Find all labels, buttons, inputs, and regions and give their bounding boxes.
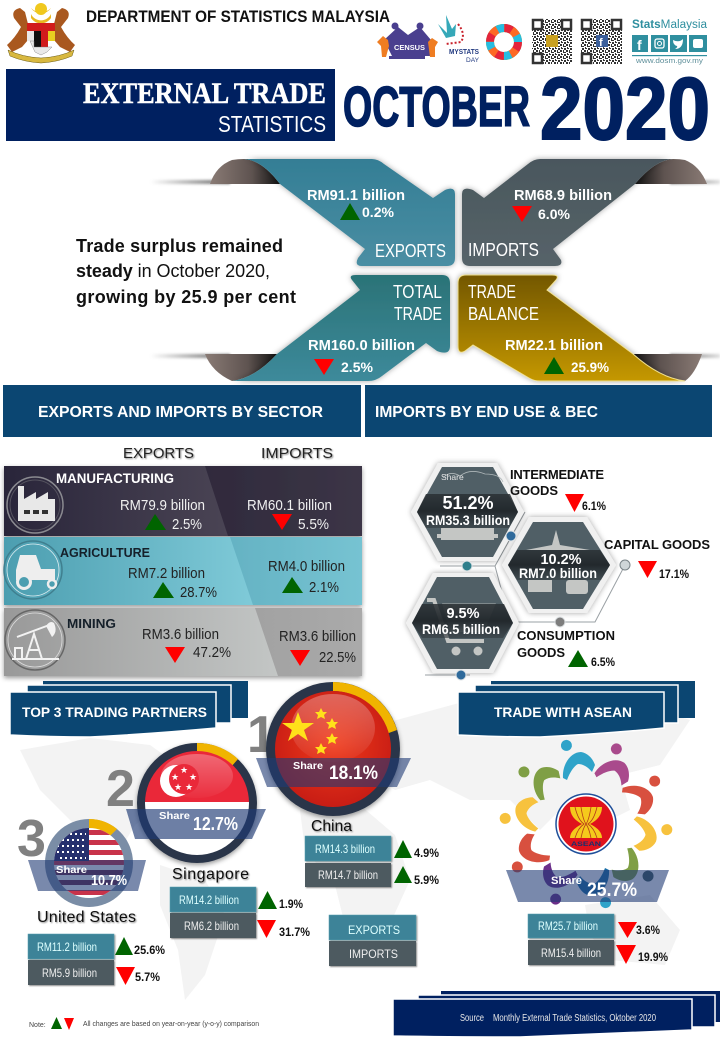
- ASEAN share and trade values: 19.9%: [638, 950, 668, 964]
- footnote: All changes are based on year-on-year (y-o-y) comparison: [83, 1019, 259, 1028]
- footnote: Note:: [29, 1022, 46, 1029]
- panel: agriculture: [4, 537, 362, 605]
- label: intermediate goods: GOODS: [510, 483, 558, 498]
- banner: top 3 trading partners: [10, 681, 248, 737]
- partner: China: RM14.3 billion: [315, 842, 375, 856]
- QR code: facebook: f: [599, 37, 603, 49]
- source banner: Source: [460, 1013, 484, 1024]
- panel: mining: RM3.6 billion: [142, 626, 219, 643]
- arrow: trade balance: RM22.1 billion: [505, 337, 603, 354]
- label: intermediate goods: [510, 467, 606, 513]
- headline message: growing by 25.9 per cent: [76, 287, 296, 307]
- partner: United States: RM5.9 billion: [42, 966, 97, 980]
- partner: Singapore: RM6.2 billion: [184, 919, 239, 933]
- section header: sector: EXPORTS AND IMPORTS BY SECTOR: [38, 404, 323, 421]
- hexagon: consumption goods: [406, 573, 519, 673]
- arrow: exports: [244, 159, 455, 266]
- panel: mining: RM3.6 billion: [279, 628, 356, 645]
- partner: Singapore: 31.7%: [279, 925, 310, 939]
- section header: end use: [365, 385, 712, 437]
- arrow: imports: RM68.9 billion: [514, 187, 612, 204]
- arrow: total trade: [232, 275, 450, 381]
- partner: Singapore: 12.7%: [193, 814, 238, 834]
- icon: ASEAN community emblem: ASEAN: [571, 842, 601, 848]
- ASEAN share and trade values: Share: [551, 875, 582, 887]
- partner: China: RM14.7 billion: [318, 868, 378, 882]
- headline message: Trade surplus remained: [76, 236, 283, 256]
- label: capital goods: 17.1%: [659, 567, 689, 581]
- title banner: STATISTICS: [218, 111, 326, 137]
- rank 1: 1: [247, 706, 276, 764]
- partner: China: 18.1%: [329, 763, 378, 784]
- headline message: [76, 236, 296, 307]
- logo: MyStats Day: MYSTATS: [449, 49, 479, 56]
- label: consumption goods: 6.5%: [591, 655, 615, 669]
- partner: United States: United States: [37, 909, 136, 926]
- rank 3: 3: [17, 810, 46, 868]
- column heading: imports: IMPORTS: [261, 445, 333, 462]
- partner: Singapore: ★: [189, 772, 197, 782]
- partner: Singapore: RM14.2 billion: [179, 893, 239, 907]
- ASEAN share and trade values: 25.7%: [587, 880, 637, 901]
- partner: China: 4.9%: [414, 846, 439, 860]
- section header: end use: IMPORTS BY END USE & BEC: [375, 404, 598, 421]
- partner: United States: RM11.2 billion: [37, 940, 97, 954]
- panel: mining: MINING: [67, 616, 116, 631]
- icon: ASEAN community emblem: [499, 739, 673, 909]
- panel: manufacturing: RM79.9 billion: [120, 497, 205, 514]
- arrow: trade balance: [458, 275, 685, 381]
- brown fold: trade balance: [633, 354, 702, 381]
- hexagon: intermediate goods: RM35.3 billion: [426, 512, 510, 528]
- organisation name: DEPARTMENT OF STATISTICS MALAYSIA: [86, 7, 390, 26]
- ASEAN share and trade values: RM25.7 billion: [538, 919, 598, 933]
- arrow: total trade: TOTAL: [393, 282, 442, 302]
- panel: manufacturing: 5.5%: [298, 516, 329, 533]
- hexagon: intermediate goods: Share: [441, 472, 464, 482]
- panel: agriculture: 28.7%: [180, 584, 217, 601]
- partner: China: [256, 682, 439, 887]
- partner: Singapore: 1.9%: [279, 897, 303, 911]
- partner: United States: 25.6%: [134, 943, 165, 957]
- panel: agriculture: RM7.2 billion: [128, 565, 205, 582]
- arrow: trade balance: TRADE: [468, 282, 516, 302]
- brown fold: imports: [635, 159, 707, 184]
- title banner: EXTERNAL TRADE: [83, 77, 326, 110]
- source banner: [393, 991, 720, 1037]
- hexagon: capital goods: 10.2%: [540, 552, 582, 568]
- title banner: [6, 69, 335, 141]
- legend: exports and imports colours: IMPORTS: [349, 947, 398, 961]
- panel: mining: 47.2%: [193, 644, 231, 661]
- hexagon: capital goods: [502, 517, 616, 613]
- logo: census: [377, 22, 438, 59]
- partner: Singapore: [126, 743, 310, 939]
- panel: agriculture: AGRICULTURE: [60, 545, 150, 560]
- banner: trade with ASEAN: TRADE WITH ASEAN: [494, 704, 632, 720]
- partner: Singapore: Share: [159, 810, 190, 822]
- banner: trade with ASEAN: [458, 681, 695, 737]
- label: intermediate goods: INTERMEDIATE: [510, 467, 604, 482]
- source banner: Monthly External Trade Statistics, Oktober 2020: [493, 1013, 656, 1024]
- label: consumption goods: CONSUMPTION: [517, 628, 615, 643]
- brown fold: total trade: [205, 354, 277, 381]
- arrow: exports: RM91.1 billion: [307, 187, 405, 204]
- partner: China: China: [311, 818, 352, 835]
- hexagon: capital goods: RM7.0 billion: [519, 565, 597, 581]
- column heading: exports: EXPORTS: [123, 445, 194, 462]
- crest: national coat of arms: [7, 3, 75, 63]
- partner: United States: [28, 819, 165, 985]
- QR code: facebook: [581, 19, 622, 64]
- partner: Singapore: ★: [180, 765, 188, 775]
- arrow: imports: 6.0%: [538, 206, 571, 222]
- arrow: total trade: TRADE: [394, 304, 442, 324]
- banner: top 3 trading partners: TOP 3 TRADING PARTNERS: [22, 704, 207, 720]
- label: intermediate goods: 6.1%: [582, 499, 606, 513]
- ASEAN share and trade values: RM15.4 billion: [541, 946, 601, 960]
- title: month: OCTOBER: [343, 75, 530, 139]
- logo: StatsMalaysia social links: StatsMalaysia: [632, 19, 708, 31]
- fold shadows around the message panel: [150, 180, 720, 358]
- hexagon: consumption goods: RM6.5 billion: [422, 621, 500, 637]
- label: capital goods: [604, 537, 710, 581]
- panel: mining: 22.5%: [319, 649, 356, 666]
- logo: MyStats Day: DAY: [466, 58, 479, 64]
- ASEAN share and trade values: 3.6%: [636, 923, 660, 937]
- panel: agriculture: 2.1%: [309, 579, 339, 596]
- section header: sector: [3, 385, 361, 437]
- arrow: exports: EXPORTS: [375, 241, 446, 261]
- label: consumption goods: [517, 628, 615, 669]
- logo: SDG wheel: [490, 28, 518, 56]
- hexagon: intermediate goods: 51.2%: [442, 493, 494, 513]
- rank 2: 2: [106, 760, 135, 818]
- logo: StatsMalaysia social links: [632, 19, 708, 65]
- legend: exports and imports colours: EXPORTS: [348, 923, 400, 937]
- hexagon: intermediate goods: [411, 463, 524, 561]
- logo: StatsMalaysia social links: f: [637, 37, 642, 53]
- arrow: exports: 0.2%: [362, 204, 395, 220]
- partner: United States: 5.7%: [135, 970, 160, 984]
- connector lines between hexagons: [425, 512, 625, 675]
- partner: Singapore: ★: [174, 782, 182, 792]
- partner: United States: Share: [56, 864, 87, 876]
- partner: United States: 10.7%: [91, 872, 127, 889]
- partner: China: Share: [293, 760, 323, 772]
- legend: exports and imports colours: [329, 915, 416, 966]
- ASEAN share and trade values: [506, 870, 669, 965]
- arrow: imports: [462, 159, 673, 266]
- arrow: imports: IMPORTS: [468, 240, 539, 260]
- logo: MyStats Day: [438, 15, 479, 64]
- brown fold: exports: [210, 159, 280, 184]
- logo: StatsMalaysia social links: www.dosm.gov.my: [635, 58, 704, 65]
- arrow: trade balance: BALANCE: [468, 304, 539, 324]
- partner: China: 5.9%: [414, 873, 439, 887]
- world map background: [20, 690, 690, 1000]
- partner: Singapore: Singapore: [172, 866, 249, 883]
- QR code: website: [532, 19, 572, 64]
- panel: agriculture: RM4.0 billion: [268, 558, 345, 575]
- panel: manufacturing: 2.5%: [172, 516, 202, 533]
- panel: manufacturing: [4, 466, 362, 536]
- headline message: steady in October 2020,: [76, 261, 270, 281]
- logo: census: CENSUS: [394, 45, 425, 52]
- connector dots: [456, 531, 630, 680]
- panel: mining: [4, 608, 362, 676]
- partner: Singapore: ★: [171, 772, 179, 782]
- label: consumption goods: GOODS: [517, 645, 565, 660]
- arrow: total trade: RM160.0 billion: [308, 337, 415, 354]
- panel: manufacturing: MANUFACTURING: [56, 471, 174, 486]
- panel: manufacturing: RM60.1 billion: [247, 497, 332, 514]
- footnote: [29, 1017, 259, 1030]
- arrow: trade balance: 25.9%: [571, 359, 610, 375]
- label: capital goods: CAPITAL GOODS: [604, 537, 710, 552]
- partner: Singapore: ★: [185, 782, 193, 792]
- arrow: total trade: 2.5%: [341, 359, 374, 375]
- hexagon: consumption goods: 9.5%: [446, 606, 480, 622]
